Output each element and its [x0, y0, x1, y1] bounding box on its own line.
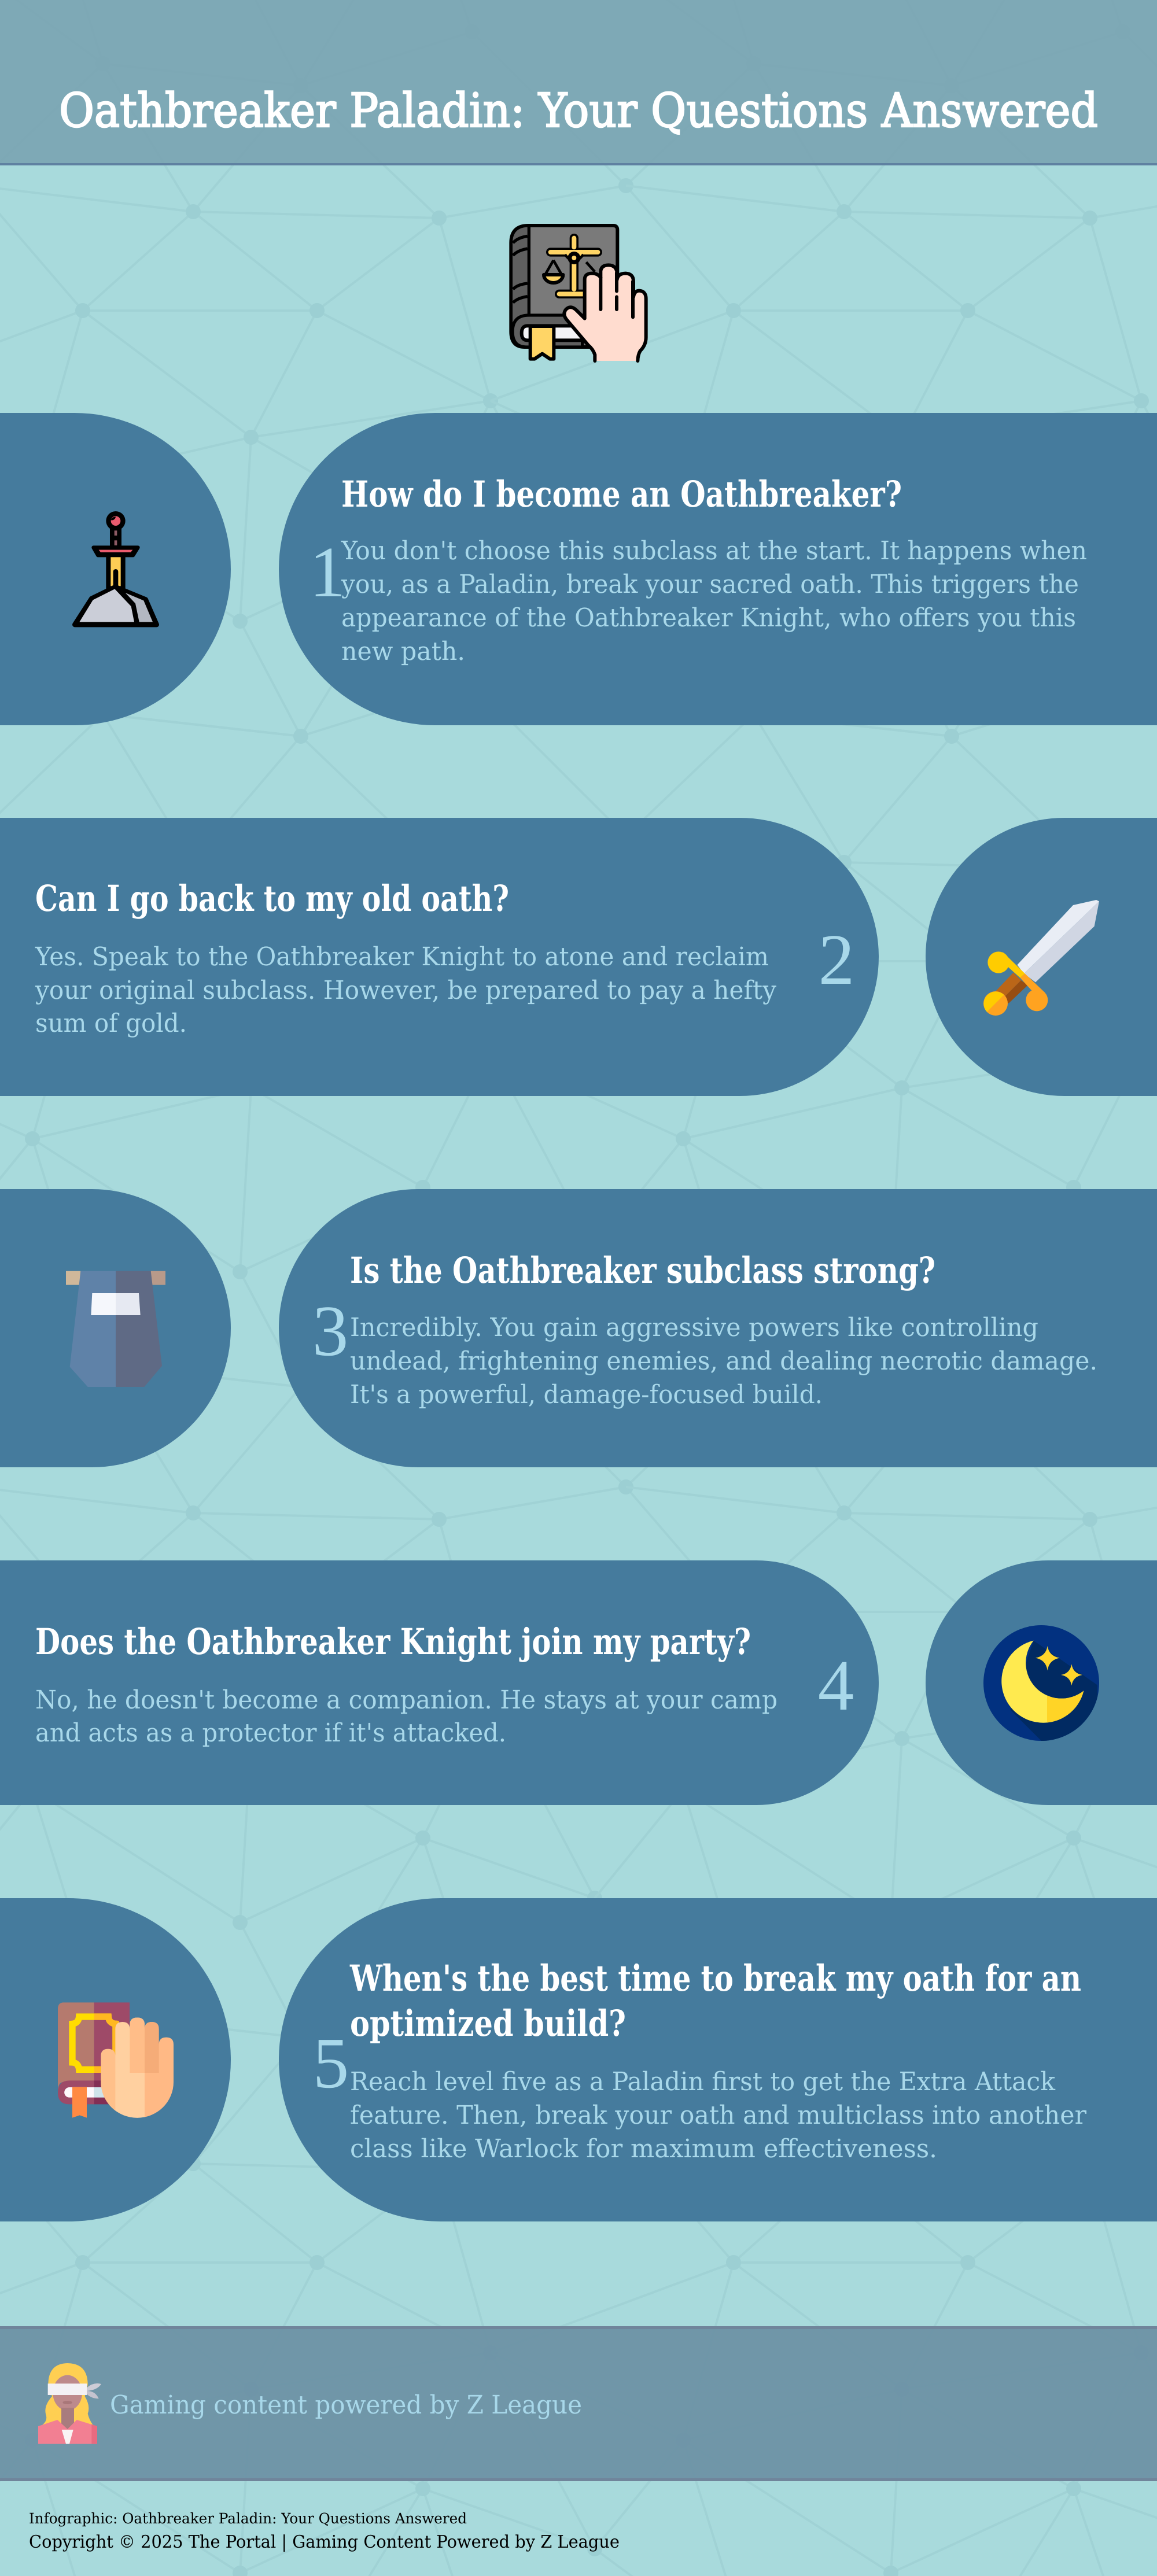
card 4: [0, 1560, 1157, 1805]
number 3: 3: [312, 1291, 348, 1371]
footer credit text: Copyright © 2025 The Portal | Gaming Content Powered by Z League: [29, 2532, 620, 2552]
body text 2: [35, 942, 776, 1038]
heading 1: How do I become an Oathbreaker?: [341, 473, 902, 515]
panel: icon circle 3: [0, 1189, 231, 1467]
body text 4: [35, 1685, 778, 1748]
panel: icon circle 2: [926, 818, 1157, 1096]
body text 5: Reach level five as a Paladin first to get the Extra Attack: [350, 2067, 1055, 2097]
body text 1: [341, 536, 1087, 666]
number 1: 1: [309, 533, 345, 612]
panel: question 5: [279, 1898, 1157, 2221]
footer credit text: Infographic: Oathbreaker Paladin: Your Questions Answered: [29, 2510, 467, 2527]
card 3: [0, 1189, 1157, 1467]
body text 2: Yes. Speak to the Oathbreaker Knight to atone and reclaim: [35, 942, 769, 972]
panel: question 4: [0, 1560, 879, 1805]
panel: icon circle 5: [0, 1898, 231, 2221]
footer credit text: [29, 2510, 620, 2552]
body text 5: [350, 2067, 1087, 2164]
panel: icon circle 4: [926, 1560, 1157, 1805]
icon: oath book with raised hand: [511, 226, 646, 361]
panel: question 1: [279, 413, 1157, 725]
card 1: [0, 413, 1157, 725]
icon: banner: [66, 1271, 165, 1387]
body text 1: appearance of the Oathbreaker Knight, who offers you this: [341, 603, 1076, 633]
panel: question 3: [279, 1189, 1157, 1467]
card 2: [0, 818, 1157, 1096]
number 2: 2: [819, 920, 854, 1000]
body text 4: and acts as a protector if it's attacked.: [35, 1718, 506, 1748]
body text 1: new path.: [341, 637, 465, 666]
card 5: [0, 1898, 1157, 2221]
icon: hand on book: [58, 2002, 175, 2121]
body text 3: Incredibly. You gain aggressive powers like controlling: [350, 1313, 1038, 1342]
body text 4: No, he doesn't become a companion. He stays at your camp: [35, 1685, 778, 1715]
number 4: 4: [818, 1646, 854, 1726]
body text 2: your original subclass. However, be prepared to pay a hefty: [35, 976, 776, 1005]
number 5: 5: [313, 2024, 349, 2103]
body text 5: class like Warlock for maximum effectiveness.: [350, 2134, 937, 2164]
body text 1: you, as a Paladin, break your sacred oath. This triggers the: [341, 570, 1079, 599]
heading 4: Does the Oathbreaker Knight join my party?: [35, 1621, 751, 1663]
heading 2: Can I go back to my old oath?: [35, 877, 509, 920]
body text 5: feature. Then, break your oath and multiclass into another: [350, 2101, 1087, 2130]
body text 3: [350, 1313, 1097, 1409]
header band: [0, 0, 1157, 165]
icon: sword in stone: [75, 511, 157, 625]
icon: sword: [983, 900, 1099, 1016]
body text 3: It's a powerful, damage-focused build.: [350, 1380, 823, 1409]
heading 3: Is the Oathbreaker subclass strong?: [350, 1249, 935, 1291]
panel: question 2: [0, 818, 879, 1096]
heading 5: optimized build?: [350, 2002, 626, 2044]
heading 5: [349, 1957, 1081, 2044]
body text 3: undead, frightening enemies, and dealing necrotic damage.: [350, 1346, 1097, 1376]
body text 2: sum of gold.: [35, 1009, 187, 1038]
icon: blindfolded woman: [38, 2363, 101, 2444]
body text 1: You don't choose this subclass at the start. It happens when: [341, 536, 1087, 566]
footer band text: Gaming content powered by Z League: [110, 2390, 582, 2420]
panel: icon circle 1: [0, 413, 231, 725]
icon: moon and stars: [983, 1625, 1099, 1741]
footer band: [0, 2326, 1157, 2481]
